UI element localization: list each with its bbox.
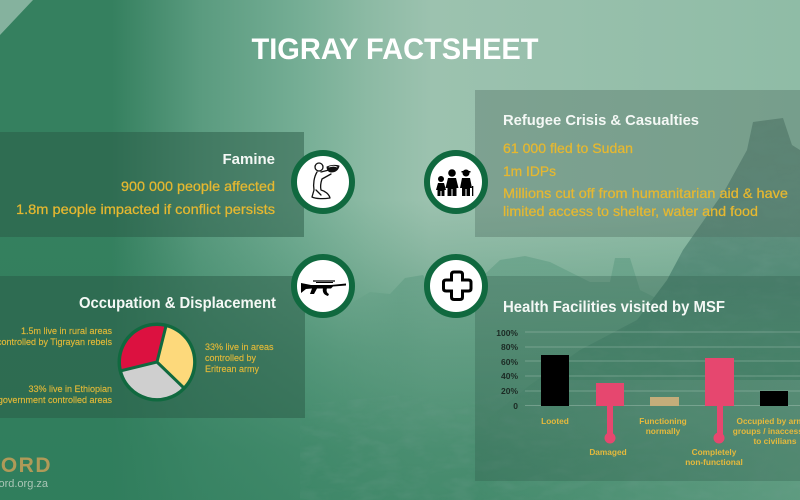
y axis labels: 100%	[496, 328, 518, 338]
pie labels: 33% live in Ethiopian	[28, 384, 112, 394]
bar labels: normally	[646, 426, 681, 436]
icon: family	[427, 153, 485, 211]
famine facts	[16, 178, 275, 217]
y axis labels: 0	[513, 401, 518, 411]
bar chart	[496, 328, 800, 467]
bar labels: Completely	[692, 447, 737, 457]
panel: refugee crisis and casualties	[475, 90, 800, 237]
pie labels: controlled by Tigrayan rebels	[0, 337, 112, 347]
bar labels: to civilians	[754, 436, 797, 446]
pie chart	[118, 322, 196, 402]
rock tower	[480, 118, 800, 425]
occupation heading: Occupation & Displacement	[79, 295, 277, 312]
y axis labels: 60%	[501, 357, 518, 367]
bar labels: non-functional	[685, 457, 743, 467]
refugee facts: Millions cut off from humanitarian aid & have	[503, 185, 788, 201]
refugee facts: limited access to shelter, water and food	[503, 203, 758, 219]
famine facts: 1.8m people impacted if conflict persists	[16, 201, 275, 217]
panel: famine	[0, 132, 304, 237]
refugee facts: 1m IDPs	[503, 163, 556, 179]
refugee facts	[503, 140, 788, 219]
pie labels: controlled by	[205, 353, 257, 363]
distant ridge	[377, 256, 654, 336]
icon: rifle	[294, 257, 352, 315]
bar labels	[541, 416, 800, 467]
y axis labels: 40%	[501, 371, 518, 381]
famine heading: Famine	[222, 151, 275, 168]
bar: damaged	[596, 383, 624, 444]
corner triangle	[0, 0, 33, 35]
health heading: Health Facilities visited by MSF	[503, 299, 725, 316]
refugee facts: 61 000 fled to Sudan	[503, 140, 633, 156]
famine facts: 900 000 people affected	[121, 178, 275, 194]
pie labels	[0, 326, 274, 405]
bar: occupied	[760, 391, 788, 406]
bar: functioning normally	[650, 397, 679, 406]
bar: completely non-functional	[705, 358, 734, 444]
y axis labels	[496, 328, 518, 411]
pie labels: Eritrean army	[205, 364, 260, 374]
panel: health facilities	[475, 276, 800, 481]
y axis labels: 80%	[501, 342, 518, 352]
y axis labels: 20%	[501, 386, 518, 396]
icon: medical cross	[427, 257, 485, 315]
pie labels: 33% live in areas	[205, 342, 274, 352]
pie labels: 1.5m live in rural areas	[21, 326, 112, 336]
bar: looted	[541, 355, 569, 406]
refugee heading: Refugee Crisis & Casualties	[503, 112, 699, 129]
logo	[0, 454, 52, 490]
bar labels: Looted	[541, 416, 569, 426]
pie labels: government controlled areas	[0, 395, 112, 405]
panel: occupation and displacement	[0, 276, 305, 418]
title: TIGRAY FACTSHEET	[252, 33, 538, 66]
bar labels: Functioning	[639, 416, 687, 426]
icon: kneeling person with bowl	[294, 153, 352, 211]
bar labels: Damaged	[589, 447, 627, 457]
